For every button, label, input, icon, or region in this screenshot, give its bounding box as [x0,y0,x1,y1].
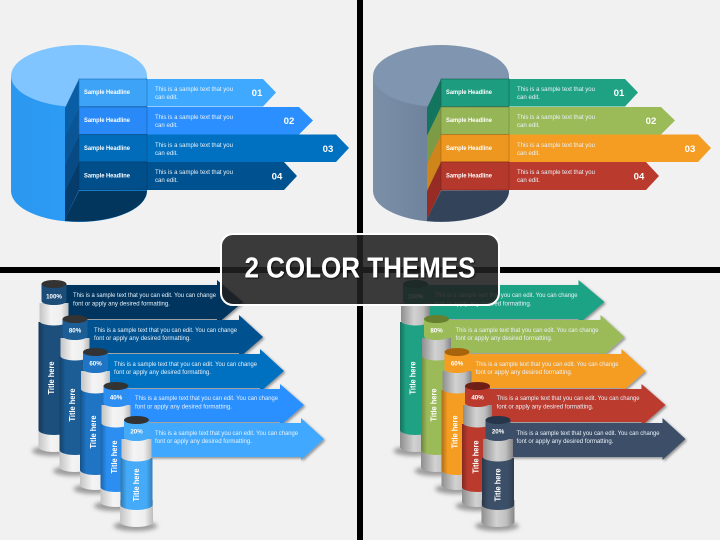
row 2 arrow [441,107,675,134]
cylinder 60%: Title here [450,415,460,448]
cylinder 40% [456,382,498,511]
cylinder top [11,45,147,107]
cylinder 80%: Title here [67,388,77,422]
cylinder 60%: Title here [88,415,98,448]
arrow 2: font or apply any desired formatting. [94,335,191,342]
arrow 3: font or apply any desired formatting. [476,369,573,376]
row 4 arrow: 04 [272,172,283,182]
row 4 arrow [441,162,659,190]
cylinder side [11,76,147,222]
row 4 arrow [79,162,297,190]
cylinder 60%: 60% [451,360,464,368]
arrow 3: This is a sample text that you can edit. You can change [114,361,258,368]
arrow 5: This is a sample text that you can edit. You can change [516,430,660,437]
row 1 arrow: 01 [252,88,263,99]
arrow 5: This is a sample text that you can edit. You can change [155,430,299,437]
arrow 2: This is a sample text that you can edit. You can change [94,327,238,334]
panel: multicolor stepped cylinders [394,280,686,531]
arrow 5 [140,418,324,460]
row 4 arrow: can edit. [155,177,178,184]
panel: multicolor database cylinder [373,45,711,222]
arrow 4 [120,384,304,426]
row 1 arrow: Sample Headline [446,89,493,96]
cylinder 100% [394,280,436,456]
cylinder 100%: Title here [46,361,56,394]
row 1 arrow: This is a sample text that you [517,86,596,93]
row 1 arrow: can edit. [155,94,178,101]
cylinder 100%: 100% [46,294,62,300]
cylinder 100%: 100% [408,294,424,300]
arrow 1 [422,280,604,324]
arrow 4: This is a sample text that you can edit. You can change [496,395,640,402]
arrow 1: This is a sample text that you can edit. You can change [434,292,578,299]
row 1 arrow: Sample Headline [84,89,131,96]
arrow 2 [80,315,263,358]
row 2 arrow: This is a sample text that you [155,114,234,121]
arrow 4: This is a sample text that you can edit. You can change [135,395,279,402]
row 1 arrow: can edit. [517,94,540,101]
row 3 arrow: can edit. [155,150,178,157]
arrow 5: font or apply any desired formatting. [155,438,252,445]
cylinder 80% [53,315,95,476]
arrow 1: font or apply any desired formatting. [73,300,170,308]
row 3 arrow: Sample Headline [84,145,131,152]
cut side wedges [65,79,79,219]
arrow 2 [442,315,624,358]
cylinder side [373,76,509,222]
cylinder 60% [74,348,116,494]
cylinder 80%: 80% [69,328,82,334]
cylinder 20%: 20% [492,428,505,436]
arrow 1: This is a sample text that you can edit. You can change [73,292,217,299]
row 2 arrow: 02 [646,116,656,127]
row 2 arrow: Sample Headline [446,117,493,124]
row 4 arrow: can edit. [517,177,540,184]
arrow 3 [462,349,646,392]
row 4 arrow: Sample Headline [446,173,493,180]
arrow 4: font or apply any desired formatting. [496,404,594,410]
arrow 1: font or apply any desired formatting. [434,300,532,308]
title banner: 2 COLOR THEMES [244,252,476,284]
row 2 arrow: can edit. [517,122,540,129]
cylinder 80%: 80% [430,328,443,334]
title banner [221,234,499,305]
row 1 arrow [441,79,638,106]
cylinder 100% [32,280,74,456]
arrow 4 [482,384,666,426]
row 3 arrow [79,134,349,162]
cylinder top [373,45,509,107]
arrow 5 [502,418,686,460]
cylinder 20%: Title here [131,468,141,502]
row 3 arrow: can edit. [517,150,540,157]
cylinder 20%: 20% [130,428,143,436]
cylinder cut floor [65,191,147,222]
arrow 3 [100,349,284,392]
arrow 4: font or apply any desired formatting. [135,404,232,410]
arrow 3: This is a sample text that you can edit. You can change [476,361,619,368]
cylinder 60%: 60% [89,360,102,368]
row 2 arrow [79,107,313,134]
arrow 1 [60,280,243,324]
cylinder 40%: 40% [110,394,123,402]
arrow 2: This is a sample text that you can edit. You can change [456,327,599,334]
cylinder 40%: 40% [471,394,484,402]
row 1 arrow [79,79,276,106]
cylinder 40%: Title here [109,440,119,474]
cylinder 80% [414,315,456,476]
row 3 arrow: 03 [685,144,695,155]
row 2 arrow: Sample Headline [84,117,131,124]
panel: blue stepped cylinders [32,280,324,531]
row 2 arrow: can edit. [155,122,178,129]
row 3 arrow: This is a sample text that you [517,142,596,149]
row 3 arrow [441,134,711,162]
arrow 5: font or apply any desired formatting. [516,438,614,445]
arrow 3: font or apply any desired formatting. [114,369,211,376]
row 4 arrow: This is a sample text that you [155,169,234,176]
cylinder 20%: Title here [492,468,502,502]
cylinder 20% [114,416,158,531]
cylinder 20% [475,416,519,531]
cylinder cut floor [427,191,509,222]
row 3 arrow: This is a sample text that you [155,142,234,149]
cylinder 60% [435,348,477,494]
row 1 arrow: 01 [614,88,625,99]
row 4 arrow: This is a sample text that you [517,169,596,176]
cylinder 80%: Title here [428,388,438,422]
arrow 2: font or apply any desired formatting. [456,335,553,342]
cut side wedges [427,79,441,219]
row 4 arrow: 04 [634,172,645,182]
cylinder 40% [94,382,136,511]
row 3 arrow: Sample Headline [446,145,493,152]
row 2 arrow: 02 [284,116,294,127]
cylinder 100%: Title here [408,361,418,394]
row 3 arrow: 03 [323,144,333,155]
row 2 arrow: This is a sample text that you [517,114,596,121]
cylinder 40%: Title here [470,440,480,474]
row 4 arrow: Sample Headline [84,173,131,180]
panel: blue database cylinder [11,45,349,222]
row 1 arrow: This is a sample text that you [155,86,234,93]
